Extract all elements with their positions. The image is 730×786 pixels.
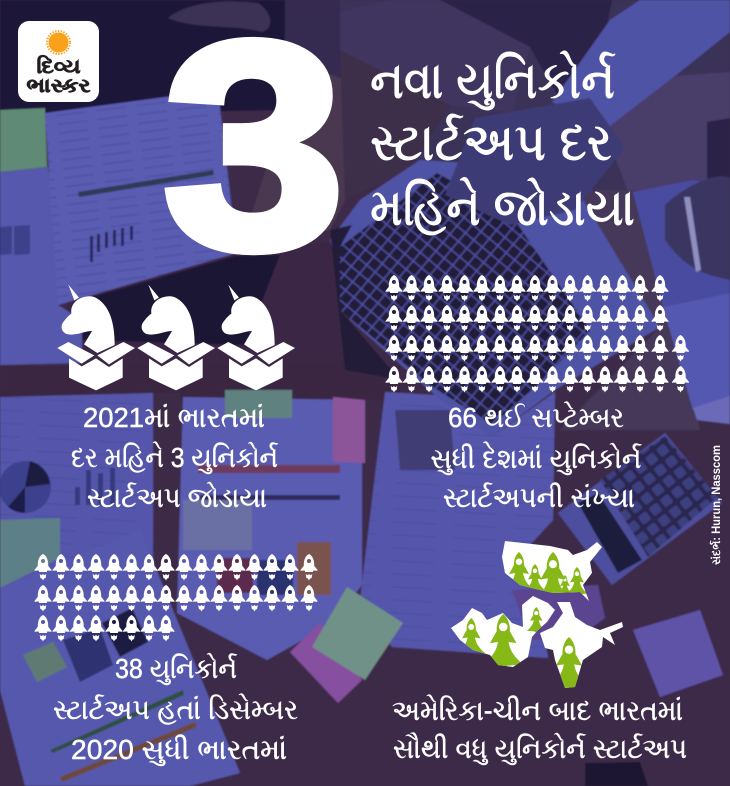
caption: 2021 monthly unicorns: 2021માં ભારતમાં — [83, 402, 265, 433]
heading — [370, 51, 635, 237]
caption: after USA and China: સૌથી વધુ યુનિકોર્ન સ્ટાર્ટઅપ — [393, 733, 687, 764]
heading: સ્ટાર્ટઅપ દર — [370, 114, 612, 172]
caption: 38 by December 2020: 2020 સુધી ભારતમાં — [71, 734, 287, 765]
caption: 2021 monthly unicorns: દર મહિને 3 યુનિકોર્ન — [71, 442, 278, 473]
caption: after USA and China: અમેરિકા-ચીન બાદ ભારતમાં — [392, 695, 683, 726]
icons: three unicorns in boxes — [57, 285, 295, 390]
caption: 66 by September: સ્ટાર્ટઅપની સંખ્યા — [443, 482, 635, 513]
logo: divya bhaskar: ભાસ્કર — [26, 76, 91, 97]
map: USA — [502, 541, 602, 603]
rocket grid: 66 unicorns — [386, 275, 689, 392]
logo: divya bhaskar — [18, 21, 99, 102]
caption: 66 by September: સુધી દેશમાં યુનિકોર્ન — [430, 442, 642, 474]
map: India — [540, 602, 623, 690]
caption: after USA and China — [392, 695, 687, 764]
heading: મહિને જોડાયા — [370, 177, 635, 237]
caption: 38 by December 2020: સ્ટાર્ટઅપ હતાં ડિસેમ્બર — [53, 694, 298, 725]
icon: orange sun — [47, 31, 70, 54]
caption: 66 by September — [430, 402, 642, 513]
map: USA, China and India with green rockets — [451, 541, 623, 690]
caption: 66 by September: 66 થઈ સપ્ટેમ્બર — [448, 402, 624, 433]
caption: 2021 monthly unicorns — [71, 402, 278, 513]
heading: નવા યુનિકોર્ન — [370, 51, 615, 111]
source credit: સંદર્ભ: Hurun, Nasscom — [708, 445, 723, 565]
caption: 38 by December 2020 — [53, 653, 298, 765]
map: China — [451, 596, 555, 668]
caption: 38 by December 2020: 38 યુનિકોર્ન — [115, 653, 237, 684]
caption: 2021 monthly unicorns: સ્ટાર્ટઅપ જોડાયા — [87, 482, 267, 513]
rocket grid: 38 unicorns — [34, 554, 318, 642]
logo: divya bhaskar: દિવ્ય — [36, 55, 80, 78]
